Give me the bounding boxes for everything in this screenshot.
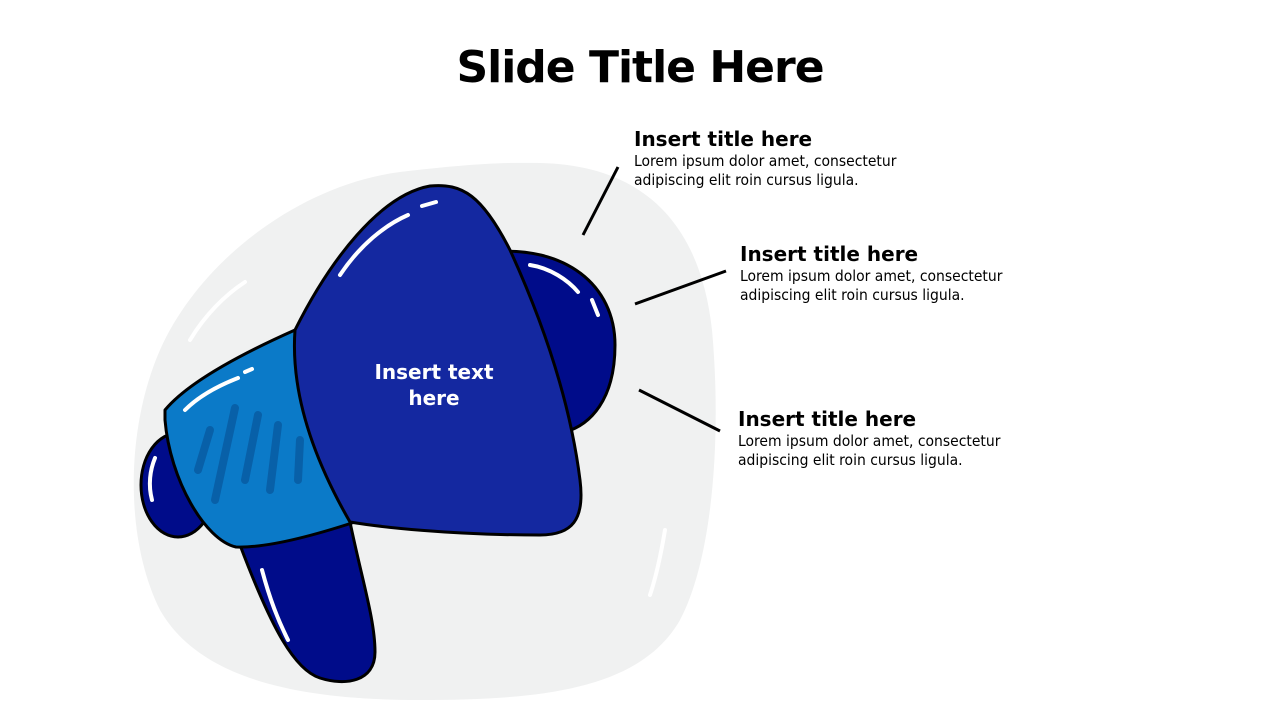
item 1 xyxy=(634,127,896,189)
item 1: Lorem ipsum dolor amet, consectetur xyxy=(634,152,896,170)
item 2: Insert title here xyxy=(740,242,918,266)
callout lines xyxy=(583,167,726,431)
item 3: adipiscing elit roin cursus ligula. xyxy=(738,451,963,469)
back cap xyxy=(490,251,615,432)
megaphone xyxy=(141,186,615,682)
left cap xyxy=(141,433,215,537)
item 2 xyxy=(740,242,1002,304)
item 3 xyxy=(738,407,1000,469)
main cone xyxy=(294,186,581,535)
background blob xyxy=(134,163,716,700)
highlights xyxy=(150,202,665,640)
item 1: Insert title here xyxy=(634,127,812,151)
title: Slide Title Here xyxy=(456,42,824,93)
center text xyxy=(374,360,494,410)
item 1: adipiscing elit roin cursus ligula. xyxy=(634,171,859,189)
light blue body xyxy=(165,330,355,547)
item 2: Lorem ipsum dolor amet, consectetur xyxy=(740,267,1002,285)
handle xyxy=(240,522,375,682)
item 3: Lorem ipsum dolor amet, consectetur xyxy=(738,432,1000,450)
stripes xyxy=(198,408,300,500)
item 3: Insert title here xyxy=(738,407,916,431)
center text: here xyxy=(408,386,460,410)
item 2: adipiscing elit roin cursus ligula. xyxy=(740,286,965,304)
center text: Insert text xyxy=(374,360,494,384)
